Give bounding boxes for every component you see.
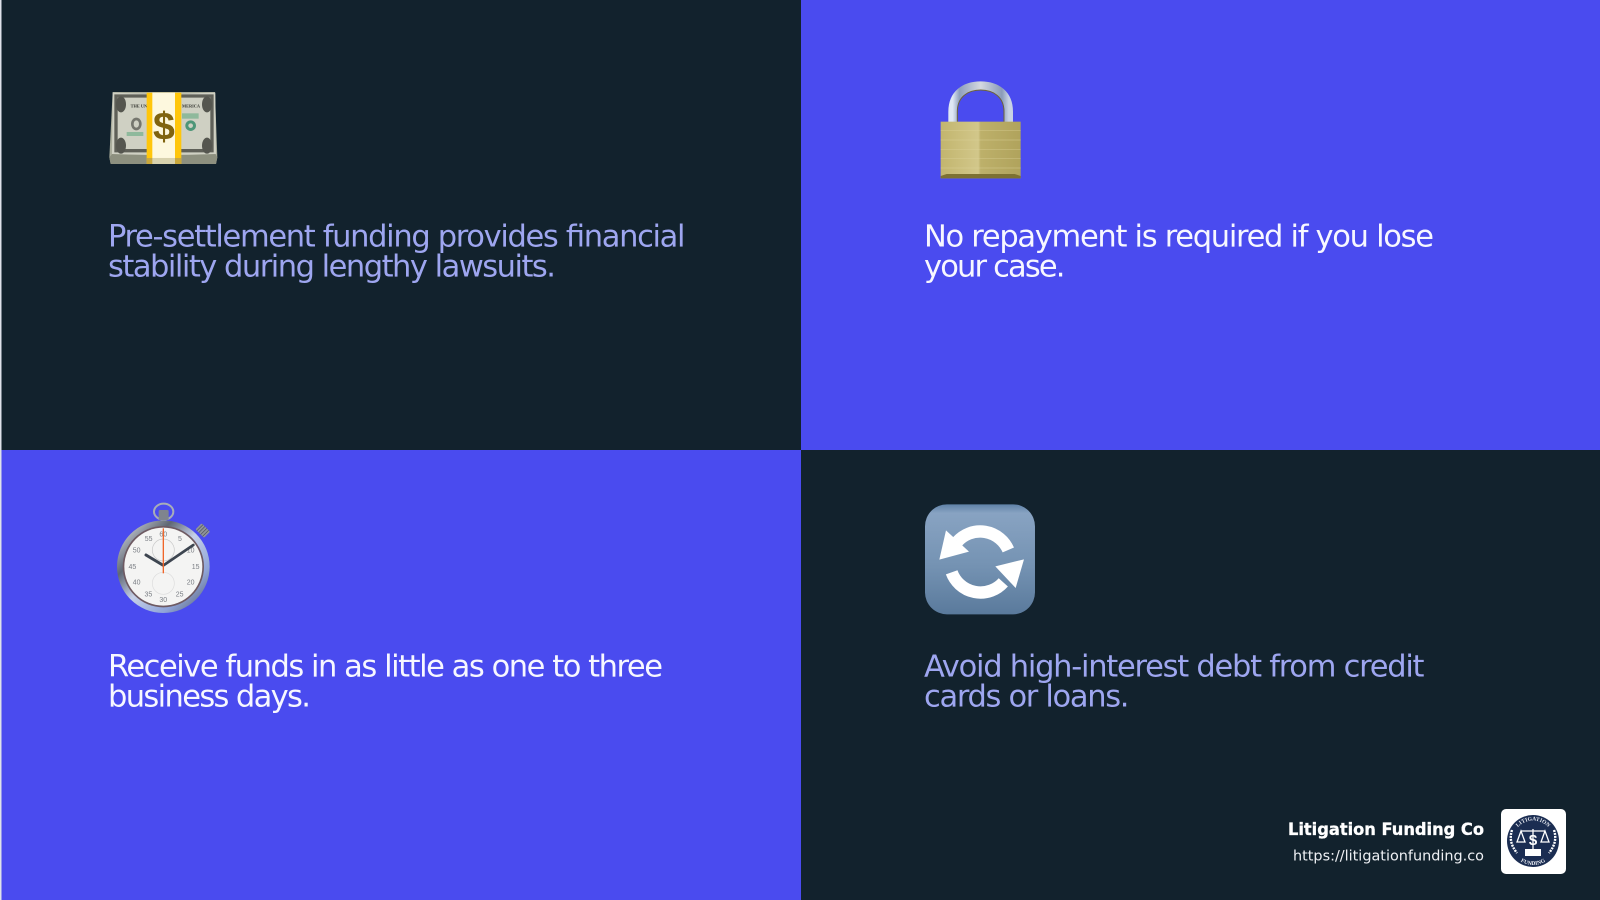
icon: stopwatch: 5 xyxy=(178,536,182,543)
text: no repayment: your case. xyxy=(924,249,1066,284)
panel: fast funds xyxy=(0,450,801,900)
icon: stopwatch: 10 xyxy=(187,548,195,555)
icon: stopwatch: 15 xyxy=(192,564,200,571)
text: no repayment xyxy=(924,219,1434,284)
icon: stopwatch: 35 xyxy=(144,592,152,599)
icon: refresh arrows xyxy=(925,504,1035,614)
icon: stopwatch: 25 xyxy=(176,592,184,599)
panel: no repayment xyxy=(801,0,1600,450)
icon: stopwatch: 30 xyxy=(159,597,167,604)
icon: stopwatch xyxy=(117,504,210,613)
footer url: https://litigationfunding.co xyxy=(1293,848,1484,864)
icon: stopwatch: 55 xyxy=(145,536,153,543)
logo badge: $ xyxy=(1529,832,1538,849)
icon: banknotes: $ xyxy=(153,104,175,148)
logo badge: LITIGATION xyxy=(1515,816,1551,828)
logo badge xyxy=(1501,809,1566,874)
text: fast funds: Receive funds in as little as one to three xyxy=(108,650,663,685)
text: financial stability: stability during lengthy lawsuits. xyxy=(108,249,556,284)
text: fast funds: business days. xyxy=(108,680,311,715)
text: avoid debt: cards or loans. xyxy=(924,680,1130,715)
text: no repayment: No repayment is required if you lose xyxy=(924,219,1434,254)
icon: stopwatch: 45 xyxy=(128,564,136,571)
footer brand name: Litigation Funding Co xyxy=(1288,820,1484,840)
logo badge: FUNDING xyxy=(1520,858,1545,865)
text: avoid debt xyxy=(924,650,1425,715)
panel: financial stability xyxy=(0,0,801,450)
text: financial stability xyxy=(108,219,686,284)
icon: stopwatch: 20 xyxy=(187,580,195,587)
icon: stopwatch: 60 xyxy=(159,531,167,538)
icon: stopwatch: 50 xyxy=(133,548,141,555)
panel: avoid debt xyxy=(924,504,1566,874)
icon: banknotes xyxy=(109,92,217,164)
text: avoid debt: Avoid high-interest debt from credit xyxy=(924,650,1425,685)
icon: banknotes: MERICA xyxy=(182,103,201,108)
icon: banknotes: THE UN xyxy=(131,103,148,108)
text: fast funds xyxy=(108,650,663,715)
icon: padlock xyxy=(941,86,1021,178)
icon: stopwatch: 40 xyxy=(133,580,141,587)
text: financial stability: Pre-settlement funding provides financial xyxy=(108,219,686,254)
